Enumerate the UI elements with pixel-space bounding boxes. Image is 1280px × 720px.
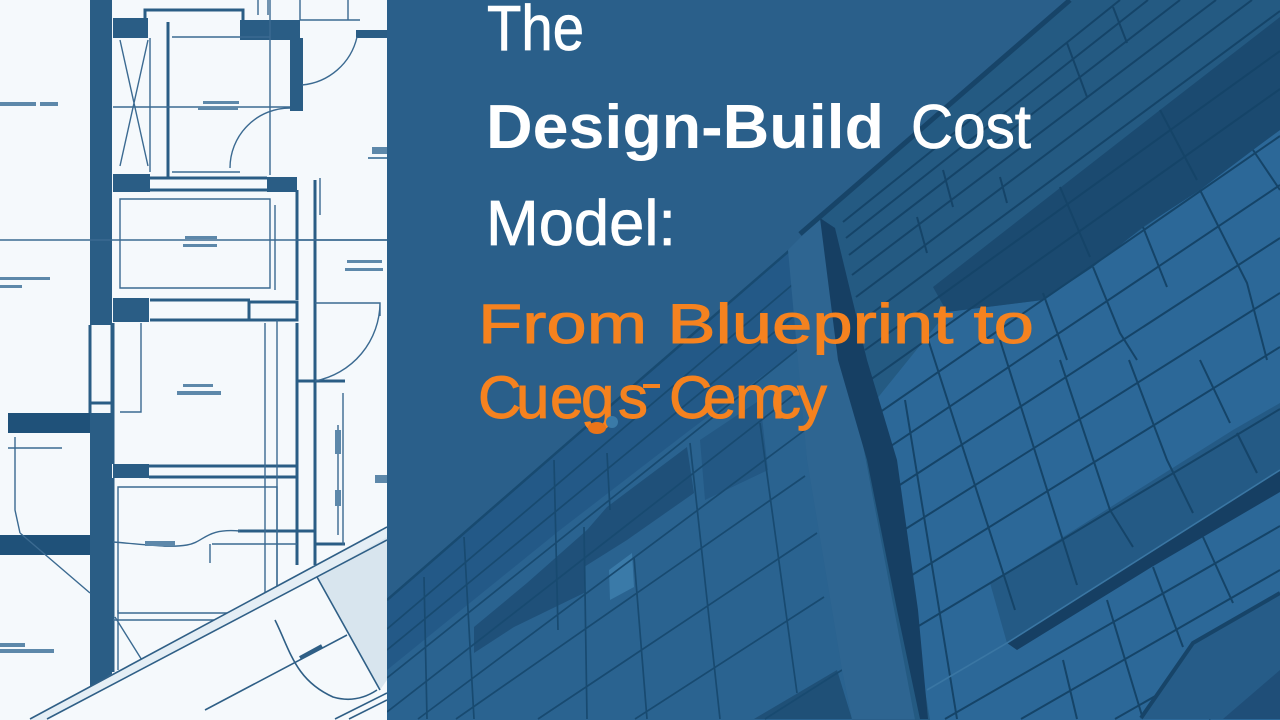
panel: building photo — [387, 0, 1280, 720]
title line: Model: Model: — [486, 187, 676, 259]
blueprint heavy lines — [90, 10, 345, 672]
panel: blueprint — [0, 0, 387, 720]
right building facade — [815, 0, 1280, 720]
blueprint solid walls — [0, 0, 387, 687]
pillar dark side — [820, 218, 928, 719]
entrance canopy — [1140, 593, 1280, 719]
building pillar — [788, 249, 805, 432]
roof edge — [800, 0, 1070, 234]
glass mullions — [843, 0, 1280, 719]
dark panels above ledge — [990, 403, 1280, 643]
left facade roof edge — [387, 250, 790, 600]
subtitle line: garbled word: CuegsCemcy — [478, 364, 827, 431]
ledge — [927, 470, 1280, 690]
subtitle — [478, 292, 1034, 434]
left building facade — [387, 284, 852, 720]
dark window band — [933, 17, 1280, 312]
title line: Design-Build Cost: Design-Build — [486, 93, 884, 162]
blueprint annotations — [0, 101, 387, 653]
blueprint angled sheet — [30, 527, 387, 720]
subtitle line: From Blueprint to: From Blueprint to — [478, 292, 1034, 355]
title — [486, 0, 1031, 259]
blueprint thin lines — [0, 0, 387, 670]
title line: Design-Build Cost: Cost — [911, 93, 1031, 162]
